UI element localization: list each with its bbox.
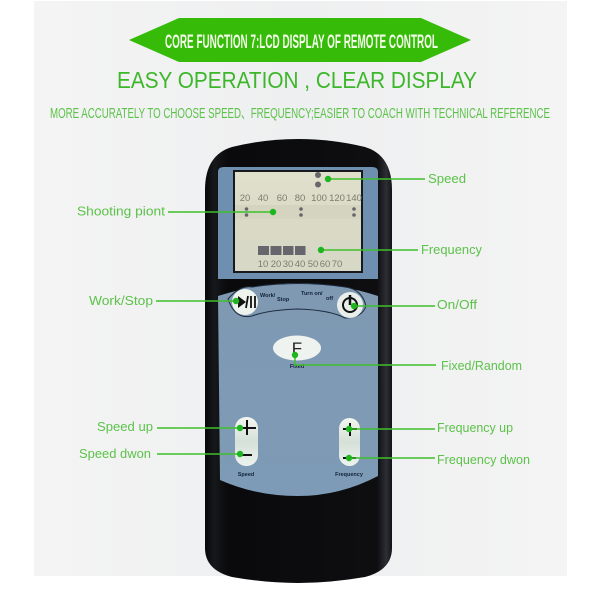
frequency scale: 60 — [320, 259, 330, 270]
frequency scale: 40 — [295, 259, 305, 270]
remote control — [205, 139, 392, 583]
label: fixed: Fixed — [290, 364, 304, 370]
callout: frequency up — [346, 420, 513, 435]
label: frequency: Frequency — [335, 472, 364, 478]
callout: speed up: Speed up — [97, 419, 153, 434]
callout: frequency: Frequency — [421, 242, 482, 257]
title banner — [129, 18, 471, 62]
lower blue control panel — [218, 283, 378, 496]
frequency scale — [258, 259, 342, 270]
upper blue frame — [218, 167, 378, 279]
speed scale: 60 — [277, 193, 287, 204]
LCD segments — [245, 172, 356, 255]
speed scale: 20 — [240, 193, 250, 204]
callout: on off — [351, 297, 477, 312]
frequency scale: 20 — [271, 259, 281, 270]
label: turn on off: Turn on/ — [301, 291, 323, 297]
callout: frequency — [318, 242, 482, 257]
button: work/stop — [232, 289, 258, 315]
callout: speed down: Speed dwon — [79, 446, 151, 461]
speed scale: 120 — [329, 193, 345, 204]
heading: EASY OPERATION , CLEAR DISPLAY — [117, 67, 477, 93]
speed scale: 40 — [258, 193, 268, 204]
button: power — [337, 292, 363, 318]
callout: frequency down: Frequency dwon — [437, 452, 530, 467]
frequency scale: 50 — [308, 259, 318, 270]
label: work stop: Stop — [277, 297, 290, 303]
callout: work stop: Work/Stop — [89, 293, 153, 308]
speed scale — [240, 193, 362, 204]
callout: fixed random: Fixed/Random — [441, 358, 522, 373]
button: fixed F: F — [292, 339, 302, 358]
speed scale: 80 — [295, 193, 305, 204]
callout: speed up — [97, 419, 243, 434]
callout: frequency down — [346, 452, 530, 467]
speed scale: 140 — [346, 193, 362, 204]
callout: fixed random — [292, 352, 522, 373]
label: turn on off: off — [326, 296, 333, 302]
callout: speed — [325, 171, 466, 186]
callout: frequency up: Frequency up — [437, 420, 513, 435]
button cradle — [228, 284, 366, 318]
callout: work stop — [89, 293, 239, 308]
speed scale: 100 — [311, 193, 327, 204]
callout: speed: Speed — [428, 171, 466, 186]
callout: on off: On/Off — [437, 297, 477, 312]
button: speed — [235, 417, 258, 466]
frequency scale: 30 — [283, 259, 293, 270]
button: fixed F — [273, 336, 321, 360]
callout: speed down — [79, 446, 243, 461]
LCD screen — [233, 170, 363, 273]
callout: shooting point — [77, 204, 276, 218]
callout: shooting point: Shooting piont — [77, 204, 165, 218]
frequency scale: 10 — [258, 259, 268, 270]
label: speed: Speed — [238, 472, 254, 478]
remote body — [205, 139, 392, 583]
button: frequency — [339, 418, 360, 466]
label: work stop: Work/ — [260, 293, 275, 299]
frequency scale: 70 — [332, 259, 342, 270]
